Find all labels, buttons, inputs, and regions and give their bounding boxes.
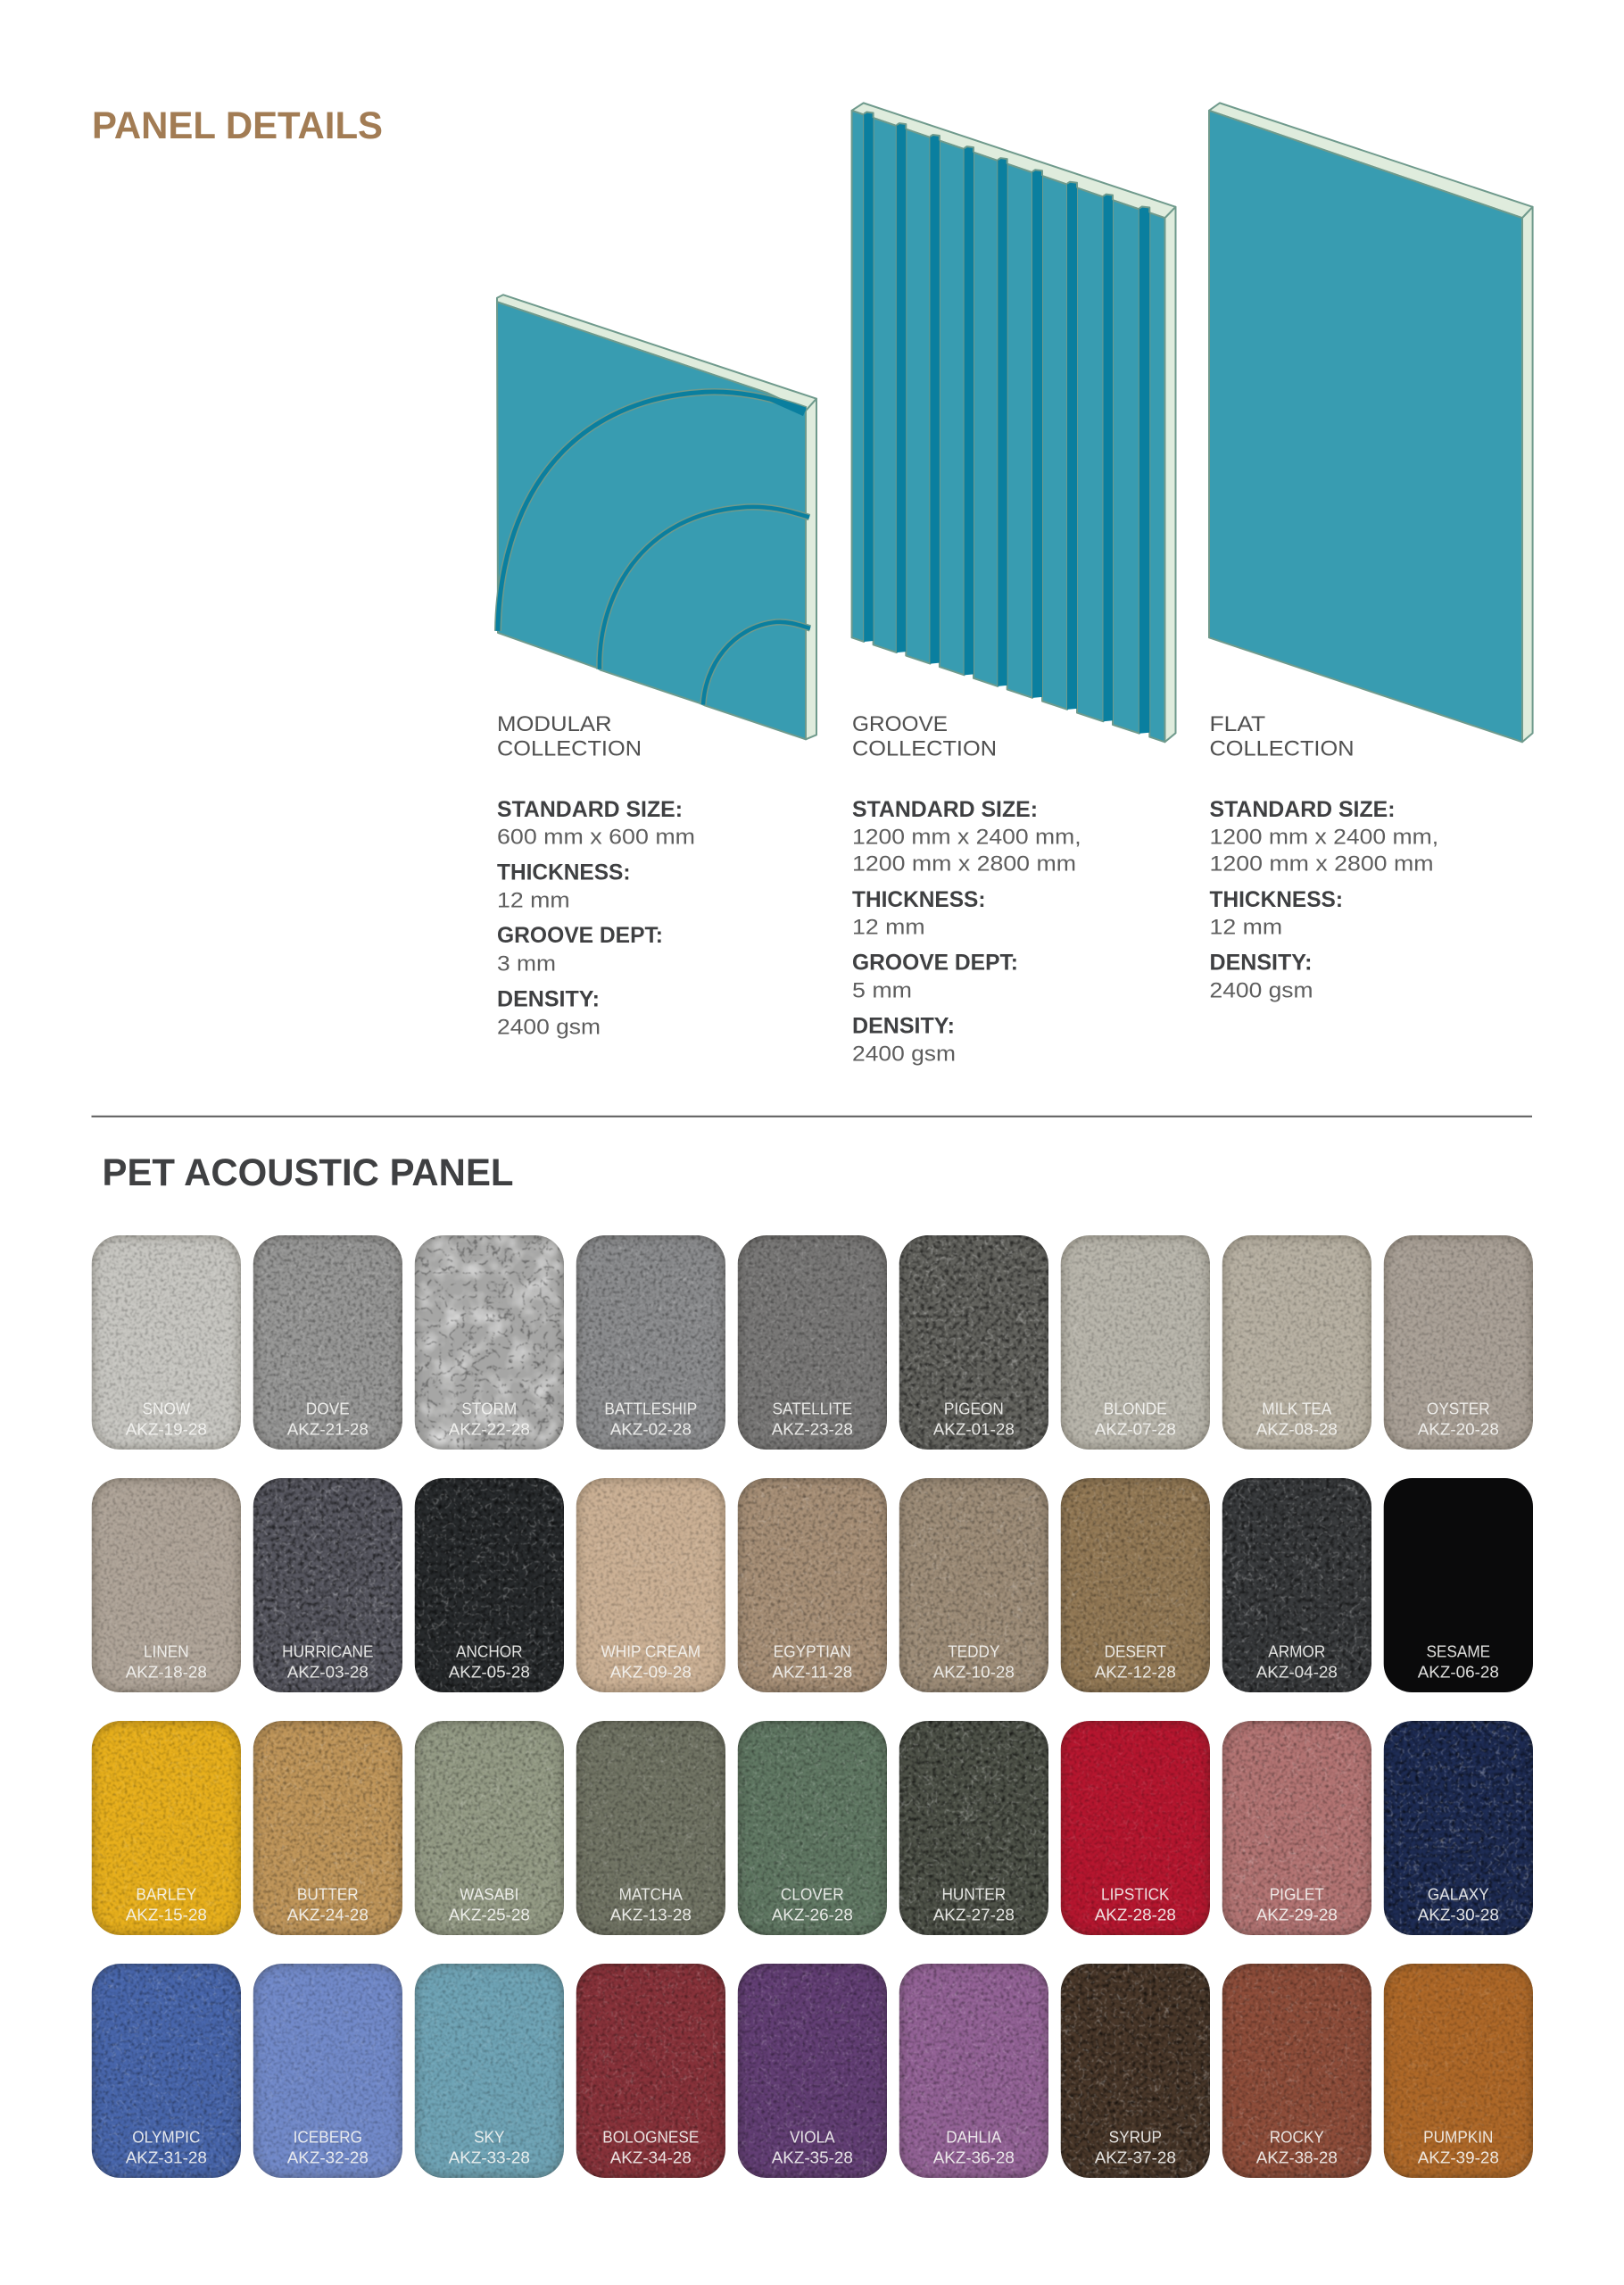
swatch: HURRICANE: AKZ-03-28 — [287, 1663, 369, 1681]
swatch: BOLOGNESE — [576, 1964, 725, 2178]
swatch: LIPSTICK — [1061, 1721, 1210, 1935]
swatch: ROCKY — [1222, 1964, 1371, 2178]
swatch: LIPSTICK: LIPSTICK — [1101, 1885, 1170, 1904]
panel: groove collection illustration — [852, 103, 1176, 742]
swatch: SATELLITE: SATELLITE — [773, 1400, 852, 1418]
swatch: DESERT — [1061, 1478, 1210, 1692]
swatch: OYSTER — [1384, 1235, 1533, 1450]
swatch: MATCHA: MATCHA — [619, 1885, 683, 1904]
swatch: MILK TEA — [1222, 1235, 1371, 1450]
swatch: STORM: AKZ-22-28 — [449, 1420, 530, 1438]
swatch: WHIP CREAM: AKZ-09-28 — [610, 1663, 692, 1681]
swatch: BARLEY — [92, 1721, 241, 1935]
text block: modular collection: GROOVE DEPT: — [497, 923, 663, 948]
swatch: HUNTER: HUNTER — [941, 1885, 1006, 1904]
swatch: GALAXY: AKZ-30-28 — [1418, 1906, 1499, 1924]
swatch: WHIP CREAM: WHIP CREAM — [601, 1642, 700, 1661]
swatch: SESAME: SESAME — [1426, 1642, 1490, 1661]
swatch: SNOW: SNOW — [143, 1400, 190, 1418]
swatch: DAHLIA: DAHLIA — [946, 2128, 1001, 2147]
swatch: SYRUP: SYRUP — [1109, 2128, 1162, 2147]
text block: modular collection: 2400 gsm — [497, 1015, 601, 1039]
swatch: DAHLIA: AKZ-36-28 — [933, 2148, 1015, 2166]
text block: flat collection: STANDARD SIZE: — [1210, 797, 1396, 822]
swatch: SNOW: AKZ-19-28 — [126, 1420, 207, 1438]
swatch: PUMPKIN: AKZ-39-28 — [1418, 2148, 1499, 2166]
text block: flat collection: COLLECTION — [1210, 736, 1355, 760]
text block: modular collection: COLLECTION — [497, 736, 642, 760]
swatch: BUTTER — [253, 1721, 402, 1935]
text block: groove collection: COLLECTION — [852, 736, 997, 760]
swatch: EGYPTIAN — [738, 1478, 887, 1692]
swatch: CLOVER: CLOVER — [781, 1885, 844, 1904]
swatch: OLYMPIC: AKZ-31-28 — [126, 2148, 207, 2166]
swatch: SATELLITE: AKZ-23-28 — [772, 1420, 853, 1438]
text block: flat collection: 1200 mm x 2800 mm — [1210, 852, 1433, 877]
swatch: OLYMPIC — [92, 1964, 241, 2178]
swatch: VIOLA — [738, 1964, 887, 2178]
swatch: SKY: AKZ-33-28 — [449, 2148, 530, 2166]
swatch: BATTLESHIP — [576, 1235, 725, 1450]
swatch: LIPSTICK: AKZ-28-28 — [1095, 1906, 1176, 1924]
text block: groove collection: THICKNESS: — [852, 887, 985, 912]
text block: groove collection: 12 mm — [852, 916, 925, 940]
swatch: MILK TEA: AKZ-08-28 — [1256, 1420, 1338, 1438]
swatch: PUMPKIN: PUMPKIN — [1423, 2128, 1493, 2147]
text block: groove collection: 1200 mm x 2800 mm — [852, 852, 1076, 877]
swatch: SKY — [415, 1964, 564, 2178]
swatch: ANCHOR: ANCHOR — [456, 1642, 523, 1661]
heading: panel details: PANEL DETAILS — [92, 104, 383, 147]
swatch: DAHLIA — [899, 1964, 1048, 2178]
swatch: SNOW — [92, 1235, 241, 1450]
swatch: DESERT: AKZ-12-28 — [1095, 1663, 1176, 1681]
swatch: ROCKY: ROCKY — [1270, 2128, 1324, 2147]
text block: flat collection — [1210, 712, 1438, 1002]
swatch: STORM — [415, 1235, 564, 1450]
text block: flat collection: 12 mm — [1210, 916, 1282, 940]
swatch: ROCKY: AKZ-38-28 — [1256, 2148, 1338, 2166]
swatch: WASABI — [415, 1721, 564, 1935]
swatch: LINEN: LINEN — [144, 1642, 189, 1661]
swatch: DOVE: DOVE — [306, 1400, 350, 1418]
text block: modular collection: 3 mm — [497, 951, 556, 976]
swatch: HUNTER: AKZ-27-28 — [933, 1906, 1015, 1924]
swatch: STORM: STORM — [461, 1400, 517, 1418]
swatch: BLONDE: BLONDE — [1104, 1400, 1167, 1418]
swatch: ARMOR: ARMOR — [1268, 1642, 1325, 1661]
swatch: BLONDE — [1061, 1235, 1210, 1450]
swatch: MATCHA: AKZ-13-28 — [610, 1906, 692, 1924]
swatch: ARMOR — [1222, 1478, 1371, 1692]
text block: groove collection: GROOVE DEPT: — [852, 951, 1018, 976]
text block: groove collection: DENSITY: — [852, 1013, 955, 1038]
swatch: DOVE: AKZ-21-28 — [287, 1420, 369, 1438]
swatch: BOLOGNESE: BOLOGNESE — [602, 2128, 699, 2147]
swatch: BATTLESHIP: AKZ-02-28 — [610, 1420, 692, 1438]
swatch: SKY: SKY — [474, 2128, 505, 2147]
swatch: PIGLET: AKZ-29-28 — [1256, 1906, 1338, 1924]
text block: groove collection: GROOVE — [852, 712, 948, 736]
swatch: SESAME: AKZ-06-28 — [1418, 1663, 1499, 1681]
swatch: CLOVER — [738, 1721, 887, 1935]
swatch: ICEBERG — [253, 1964, 402, 2178]
panel: flat collection illustration — [1209, 103, 1533, 742]
swatch: TEDDY: AKZ-10-28 — [933, 1663, 1015, 1681]
swatch: MILK TEA: MILK TEA — [1262, 1400, 1331, 1418]
swatch: PIGEON — [899, 1235, 1048, 1450]
swatch: BARLEY: BARLEY — [136, 1885, 196, 1904]
text block: flat collection: THICKNESS: — [1210, 887, 1343, 912]
swatch: ANCHOR — [415, 1478, 564, 1692]
text block: flat collection: 1200 mm x 2400 mm, — [1210, 826, 1438, 850]
text block: modular collection: 600 mm x 600 mm — [497, 826, 695, 850]
swatch: GALAXY: GALAXY — [1428, 1885, 1489, 1904]
swatch: GALAXY — [1384, 1721, 1533, 1935]
text block: groove collection: 2400 gsm — [852, 1042, 956, 1066]
swatch: OLYMPIC: OLYMPIC — [132, 2128, 200, 2147]
text block: modular collection: MODULAR — [497, 712, 612, 736]
swatch: SYRUP: AKZ-37-28 — [1095, 2148, 1176, 2166]
swatch: HURRICANE — [253, 1478, 402, 1692]
swatch: VIOLA: AKZ-35-28 — [772, 2148, 853, 2166]
text block: modular collection — [497, 712, 695, 1039]
swatch: ICEBERG: AKZ-32-28 — [287, 2148, 369, 2166]
swatch: HURRICANE: HURRICANE — [282, 1642, 374, 1661]
swatch: VIOLA: VIOLA — [790, 2128, 835, 2147]
swatch: DESERT: DESERT — [1105, 1642, 1166, 1661]
swatch: TEDDY: TEDDY — [948, 1642, 1000, 1661]
swatch: PIGLET — [1222, 1721, 1371, 1935]
swatch: BUTTER: AKZ-24-28 — [287, 1906, 369, 1924]
swatch: PIGEON: PIGEON — [944, 1400, 1004, 1418]
swatch: ANCHOR: AKZ-05-28 — [449, 1663, 530, 1681]
text block: groove collection — [852, 712, 1081, 1066]
swatch: SATELLITE — [738, 1235, 887, 1450]
text block: modular collection: THICKNESS: — [497, 860, 630, 885]
swatch: EGYPTIAN: AKZ-11-28 — [772, 1663, 852, 1681]
text block: modular collection: STANDARD SIZE: — [497, 797, 683, 822]
swatch: PUMPKIN — [1384, 1964, 1533, 2178]
text block: groove collection: 5 mm — [852, 978, 912, 1002]
swatch: WASABI: WASABI — [460, 1885, 518, 1904]
swatch: ARMOR: AKZ-04-28 — [1256, 1663, 1338, 1681]
panel: colour swatch grid — [92, 1235, 1533, 2178]
swatch: BOLOGNESE: AKZ-34-28 — [610, 2148, 692, 2166]
text block: flat collection: DENSITY: — [1210, 951, 1312, 976]
panel: modular collection illustration — [497, 295, 816, 739]
text block: groove collection: 1200 mm x 2400 mm, — [852, 826, 1081, 850]
swatch: HUNTER — [899, 1721, 1048, 1935]
swatch: ICEBERG: ICEBERG — [294, 2128, 362, 2147]
text block: flat collection: FLAT — [1210, 712, 1265, 736]
swatch: MATCHA — [576, 1721, 725, 1935]
swatch: BUTTER: BUTTER — [297, 1885, 359, 1904]
swatch: LINEN — [92, 1478, 241, 1692]
text block: modular collection: DENSITY: — [497, 986, 600, 1011]
swatch: CLOVER: AKZ-26-28 — [772, 1906, 853, 1924]
swatch: BLONDE: AKZ-07-28 — [1095, 1420, 1176, 1438]
swatch: PIGLET: PIGLET — [1270, 1885, 1324, 1904]
text block: modular collection: 12 mm — [497, 889, 570, 913]
swatch: PIGEON: AKZ-01-28 — [933, 1420, 1015, 1438]
swatch: WASABI: AKZ-25-28 — [449, 1906, 530, 1924]
text block: flat collection: 2400 gsm — [1210, 978, 1313, 1002]
swatch: BARLEY: AKZ-15-28 — [126, 1906, 207, 1924]
swatch: TEDDY — [899, 1478, 1048, 1692]
text block: groove collection: STANDARD SIZE: — [852, 797, 1038, 822]
swatch: EGYPTIAN: EGYPTIAN — [774, 1642, 851, 1661]
swatch: SYRUP — [1061, 1964, 1210, 2178]
swatch: LINEN: AKZ-18-28 — [126, 1663, 207, 1681]
swatch: SESAME — [1384, 1478, 1533, 1692]
swatch: WHIP CREAM — [576, 1478, 725, 1692]
swatch: OYSTER: OYSTER — [1427, 1400, 1490, 1418]
swatch: DOVE — [253, 1235, 402, 1450]
swatch: OYSTER: AKZ-20-28 — [1418, 1420, 1499, 1438]
heading: pet acoustic panel: PET ACOUSTIC PANEL — [102, 1151, 514, 1194]
swatch: BATTLESHIP: BATTLESHIP — [604, 1400, 697, 1418]
